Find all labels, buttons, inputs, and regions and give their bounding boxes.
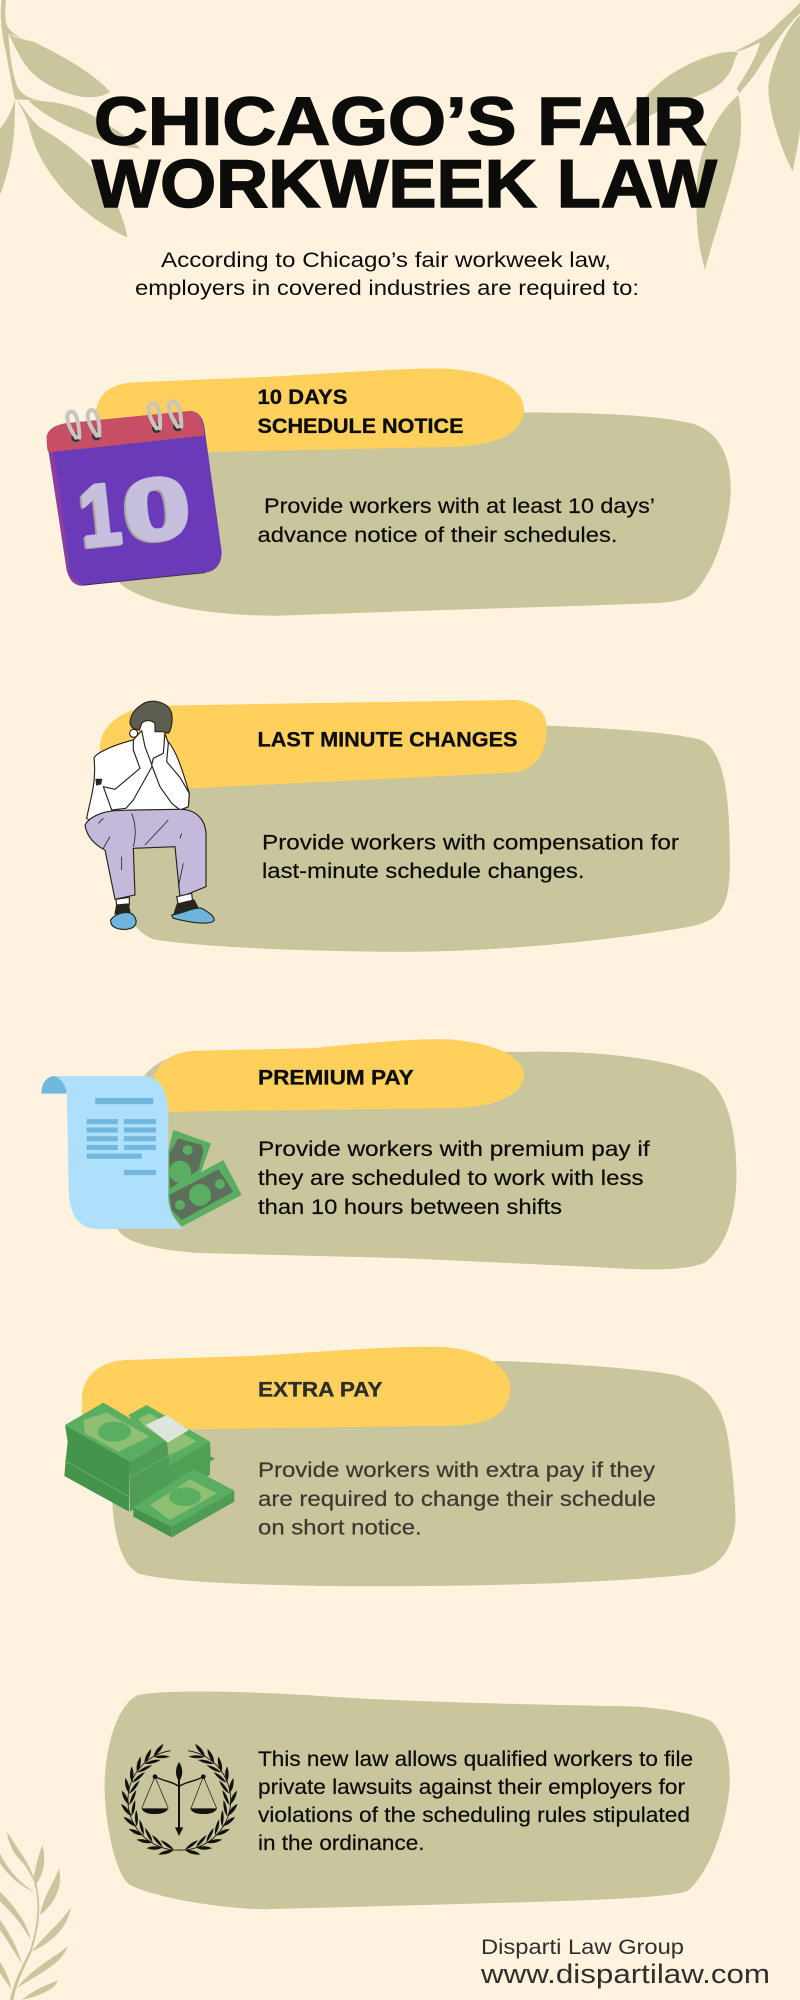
title	[92, 84, 718, 222]
body text	[262, 831, 679, 883]
icon: distressed seated man	[85, 701, 214, 929]
intro text: employers in covered industries are required to:	[135, 277, 639, 300]
title: CHICAGO’S FAIR	[94, 84, 707, 160]
icon: receipt with banknotes	[41, 1076, 242, 1229]
intro text	[135, 249, 639, 300]
panel background blob	[96, 412, 731, 616]
heading: LAST MINUTE CHANGES	[258, 728, 518, 752]
panel: extra pay	[64, 1347, 735, 1586]
body text: in the ordinance.	[258, 1832, 424, 1855]
icon: stacks of cash	[64, 1403, 234, 1537]
body text: private lawsuits against their employers for	[258, 1776, 685, 1799]
body text: Provide workers with premium pay if	[258, 1138, 650, 1161]
heading: EXTRA PAY	[258, 1377, 382, 1401]
footer: firm name and website: Disparti Law Group	[481, 1936, 684, 1959]
body text: they are scheduled to work with less	[258, 1167, 644, 1190]
heading banner	[96, 368, 524, 461]
panel: private lawsuits	[105, 1691, 730, 1909]
body text: This new law allows qualified workers to file	[258, 1748, 693, 1771]
body text: violations of the scheduling rules stipulated	[258, 1804, 690, 1827]
icon: calendar	[47, 401, 222, 586]
heading: 10 DAYS	[258, 385, 348, 409]
icon: calendar: 1	[75, 466, 125, 565]
panel: 10 days schedule notice	[47, 368, 731, 616]
footer: firm name and website: www.dispartilaw.com	[480, 1959, 770, 1989]
body text	[258, 1748, 693, 1855]
icon: calendar: 0	[119, 459, 195, 561]
body text: than 10 hours between shifts	[258, 1196, 562, 1219]
panel background blob	[115, 726, 730, 952]
decoration: bottom-left plant	[0, 1832, 71, 2000]
icon: scales of justice in laurel wreath	[121, 1744, 238, 1857]
heading	[258, 385, 464, 438]
body text: last-minute schedule changes.	[262, 860, 584, 883]
panel: last minute changes	[85, 700, 730, 952]
heading: SCHEDULE NOTICE	[258, 414, 464, 438]
heading banner	[82, 1347, 510, 1429]
panel: premium pay	[41, 1039, 736, 1269]
body text: are required to change their schedule	[258, 1488, 656, 1511]
decoration: top-right leaves	[625, 3, 800, 269]
panel background blob	[105, 1691, 730, 1909]
footer: firm name and website	[480, 1936, 770, 1989]
body text: Provide workers with at least 10 days’	[264, 495, 655, 518]
intro text: According to Chicago’s fair workweek law,	[161, 249, 611, 272]
body text: on short notice.	[258, 1516, 422, 1540]
body text	[258, 1459, 656, 1540]
body text	[258, 495, 655, 547]
body text	[258, 1138, 650, 1219]
body text: advance notice of their schedules.	[258, 524, 618, 547]
panel background blob	[110, 1361, 735, 1586]
body text: Provide workers with compensation for	[262, 831, 679, 854]
decoration: top-left leaves	[0, 0, 141, 237]
body text: Provide workers with extra pay if they	[258, 1459, 656, 1482]
heading banner	[154, 1039, 524, 1112]
heading: PREMIUM PAY	[258, 1066, 414, 1090]
panel background blob	[117, 1052, 736, 1269]
title: WORKWEEK LAW	[92, 146, 718, 222]
heading banner	[100, 700, 547, 788]
